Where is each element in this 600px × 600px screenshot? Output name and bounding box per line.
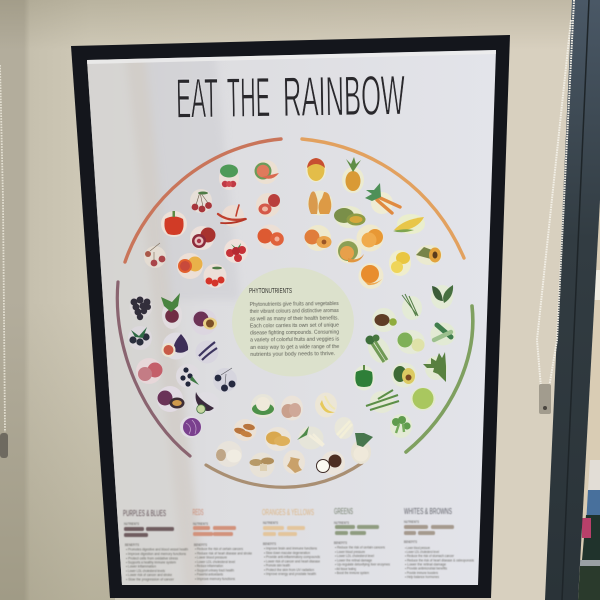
icon: blackcurrants: [128, 326, 152, 350]
phytonutrients body text: their vibrant colours and distinctive aromas: [250, 308, 339, 315]
icon: butternut squash: [308, 190, 332, 216]
arc: reds: [125, 139, 281, 262]
icon: arugula: [423, 352, 447, 382]
legend: reds: REDS: [192, 508, 204, 517]
icon: grapefruit: [177, 253, 203, 279]
benefits list: • Provide anti-inflammatory compounds: [264, 555, 320, 559]
icon: white asparagus: [334, 417, 354, 439]
benefits label: BENEFITS: [263, 541, 276, 546]
benefits list: • Supports a healthy immune system: [126, 560, 176, 564]
title: EAT: [176, 66, 218, 130]
icon: beet: [161, 293, 182, 329]
benefits list: • Lower blood pressure: [335, 550, 365, 554]
icon: red cabbage: [180, 416, 202, 438]
heading: ORANGES & YELLOWS: [262, 508, 314, 517]
icon: chives: [402, 294, 422, 320]
icon: eggplant: [193, 392, 219, 414]
icon: peaches: [304, 225, 332, 251]
phytonutrients body text: nutrients your body needs to thrive.: [250, 351, 335, 358]
nutrients label: NUTRIENTS: [404, 519, 419, 524]
benefits list: [126, 548, 188, 582]
icon: kale: [431, 285, 453, 309]
nutrient pills: [404, 525, 454, 535]
benefits list: • Lower inflammation: [126, 565, 156, 569]
icon: green mangoes: [334, 206, 366, 228]
arc: oranges and yellows: [302, 139, 464, 258]
icon: cucumbers: [430, 322, 456, 346]
heading: WHITES & BROWNS: [404, 507, 452, 516]
icon: tomatoes: [258, 224, 284, 250]
icon: blueberries: [213, 368, 237, 392]
icon: purple beans: [196, 340, 218, 364]
benefits label: BENEFITS: [194, 542, 207, 547]
benefits list: • Protect cells from oxidative stress: [126, 556, 178, 560]
phytonutrients body text: disease fighting compounds. Consuming: [250, 330, 339, 336]
text: RAINBOW: [282, 63, 406, 128]
legend: oranges and yellows: [262, 508, 320, 576]
icon: celery: [363, 333, 395, 367]
icon: figs: [162, 332, 190, 360]
icon: purple plum: [157, 386, 184, 412]
benefits list: • Reduce risk of heart disease and stroke: [195, 551, 252, 555]
benefits list: • Provide immune boosters: [405, 571, 438, 575]
benefits list: • Lower the retinal damage: [405, 562, 446, 566]
icon: lime: [410, 388, 436, 410]
benefits list: • Protect the skin from UV radiation: [264, 568, 314, 572]
icon: garlic: [216, 441, 242, 467]
heading: GREENS: [334, 507, 353, 516]
benefits list: • Slow down macular degeneration: [264, 551, 310, 555]
benefits list: • Improve brain and immune functions: [264, 546, 317, 550]
phytonutrients body text: an easy way to get a wide range of the: [250, 344, 339, 351]
legend: reds: [192, 508, 252, 581]
phytonutrients body text: Each color carries its own set of unique: [250, 323, 339, 329]
benefits list: • Improve memory functions: [195, 577, 235, 581]
nutrient pills: [335, 525, 379, 535]
icon: asparagus: [366, 390, 399, 413]
nutrient pills: [193, 526, 236, 536]
benefits list: • Reduce inflammation: [195, 564, 223, 568]
nutrient pills: [124, 527, 174, 537]
icon: passion fruit: [191, 309, 217, 335]
phytonutrients body text: Phytonutrients give fruits and vegetables: [250, 301, 339, 308]
benefits list: • Lower blood pressure: [195, 556, 227, 560]
benefits list: • Aid tissue healing: [335, 567, 356, 571]
icon: parsnip: [297, 426, 324, 450]
benefits list: • Help balance hormones: [405, 575, 439, 579]
benefits list: • Promotes digestive and blood vessel health: [126, 548, 188, 552]
icon: avocado: [392, 362, 416, 388]
icon: pomegranate: [190, 226, 216, 250]
icon: orange segments: [358, 263, 384, 289]
benefits list: • Lower risk of cancer and heart disease: [264, 559, 320, 563]
benefits label: BENEFITS: [404, 539, 417, 544]
icon: kiwi: [372, 308, 397, 332]
icon: broccoli: [390, 414, 412, 438]
icon: pineapple: [342, 157, 364, 193]
legend: whites and browns: [404, 507, 474, 579]
benefits list: • Lower LDL cholesterol level: [405, 550, 439, 554]
icon: papaya: [416, 245, 442, 265]
benefits label: BENEFITS: [125, 542, 139, 547]
benefits list: • Boost the immune system: [335, 571, 369, 575]
benefits list: • Improve digestion and memory functions: [126, 552, 186, 556]
arc: purples and blues: [117, 282, 190, 456]
phytonutrients heading: PHYTONUTRIENTS: [249, 286, 292, 295]
icon: raspberries: [224, 239, 248, 263]
benefits list: • Reduce the risk of heart disease & osteoporosis: [405, 558, 474, 562]
icon: blackberries: [176, 364, 200, 388]
nutrients label: NUTRIENTS: [334, 520, 349, 525]
blind cord right: [537, 0, 574, 414]
benefits list: • Lower risk of cancer and stroke: [126, 573, 172, 577]
icon: red currants: [204, 264, 226, 288]
poster paper: [87, 50, 496, 585]
icon: watermelon: [254, 160, 279, 184]
phytonutrients body text: as well as many of their health benefits.: [250, 315, 339, 322]
benefits list: • Slow the progression of cancer: [126, 578, 175, 582]
poster frame: [71, 35, 510, 598]
benefits list: • Powerful antioxidants: [195, 572, 223, 576]
benefits list: • Improve energy and prostate health: [264, 572, 316, 576]
food icons: all groups: [128, 157, 456, 478]
benefits list: • Lower the retinal damage: [335, 558, 372, 562]
benefits list: [195, 547, 252, 581]
window frame: [545, 0, 600, 600]
icon: almonds: [233, 419, 256, 441]
nutrients label: NUTRIENTS: [193, 521, 208, 526]
center circle: phytonutrients: [232, 268, 354, 376]
benefits list: [335, 546, 390, 575]
icon: ginger: [283, 450, 305, 474]
benefits list: • Support urinary tract health: [195, 568, 234, 572]
benefits list: • Reduce the risk of certain cancers: [335, 546, 385, 550]
icon: red bell pepper: [161, 211, 187, 237]
icon: coconut: [316, 451, 345, 475]
outdoor view through window: [578, 200, 600, 600]
icon: cranberries: [144, 243, 166, 268]
benefits list: • Promote skin health: [264, 564, 290, 568]
icon: mango: [306, 158, 326, 182]
benefits list: • Lower blood pressure: [405, 546, 430, 550]
icon: lemon: [389, 250, 411, 276]
icon: cherries: [190, 189, 212, 213]
icon: radish: [219, 164, 239, 190]
icon: oranges: [356, 224, 384, 252]
window reflection on paper: [80, 50, 496, 590]
icon: shallots: [281, 396, 303, 420]
arc: whites and browns: [206, 463, 362, 487]
benefits list: • Provide antimicrobial benefits: [405, 567, 447, 571]
benefits list: • Up-regulate detoxifying liver enzymes: [335, 562, 390, 566]
icon: chili peppers: [218, 205, 246, 227]
icon: grapes: [130, 296, 152, 320]
icon: green bell pepper: [354, 365, 374, 390]
title: THE: [227, 65, 270, 129]
icon: potatoes: [265, 427, 291, 451]
heading: PURPLES & BLUES: [123, 509, 166, 518]
icon: corn: [393, 214, 425, 234]
arc: greens: [406, 306, 473, 452]
benefits list: • Lower LDL cholesterol levels: [126, 569, 165, 573]
blind cord left: [0, 65, 8, 458]
benefits list: • Lower LDL cholesterol level: [195, 560, 235, 564]
benefits label: BENEFITS: [334, 540, 347, 545]
icon: carrots: [365, 183, 400, 214]
icon: plums: [136, 358, 162, 384]
benefits list: [264, 546, 320, 576]
benefits list: • Reduce the risk of certain cancers: [195, 547, 243, 551]
icon: green apples: [397, 330, 425, 354]
benefits list: • Lower LDL cholesterol level: [335, 554, 374, 558]
legend: purples and blues: [123, 509, 188, 582]
benefits list: • Reduce the risk of stomach cancer: [405, 554, 455, 558]
icon: strawberries: [256, 193, 280, 217]
title: [176, 63, 406, 130]
nutrients label: NUTRIENTS: [124, 521, 139, 526]
icon: mushrooms: [250, 452, 274, 478]
nutrients label: NUTRIENTS: [263, 520, 278, 525]
icon: cantaloupe: [336, 238, 364, 264]
icon: bananas: [315, 392, 337, 418]
icon: turnip: [351, 433, 373, 464]
benefits list: [405, 546, 474, 579]
phytonutrients body text: a variety of colorful fruits and veggies is: [250, 337, 339, 344]
legend: greens: [334, 507, 390, 575]
icon: cauliflower: [251, 394, 275, 418]
nutrient pills: [263, 526, 305, 536]
phytonutrients body text: [250, 301, 340, 358]
